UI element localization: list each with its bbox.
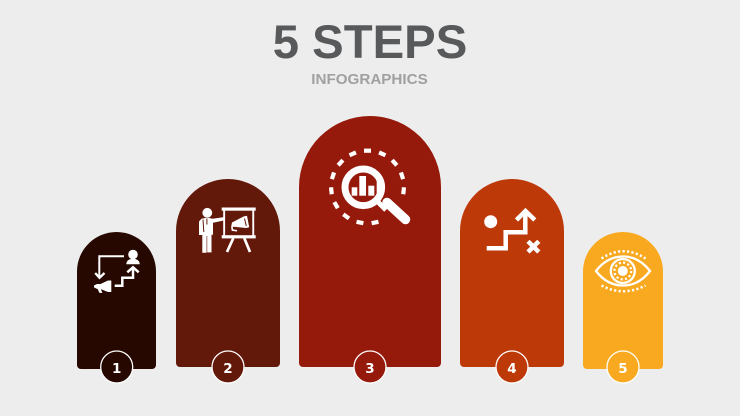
icon: person, stairs and megaphone [94, 250, 140, 293]
number badge 1: 1 [112, 361, 121, 377]
icon: magnifier with bar chart [331, 151, 406, 223]
number badge 3 [354, 351, 386, 383]
number badge 2 [212, 351, 244, 383]
number badge 2: 2 [223, 361, 233, 377]
icon: presenter at board [199, 208, 256, 253]
number badge 3: 3 [365, 361, 375, 377]
title: 5 STEPS [273, 16, 467, 69]
number badge 5 [607, 351, 639, 383]
icon: stairs with arrow, dot and cross [484, 211, 539, 252]
number badge 5: 5 [618, 361, 628, 377]
number badge 4 [496, 351, 528, 383]
panel: step 1 [77, 232, 156, 383]
icon: eye [596, 251, 650, 291]
number badge 1 [101, 351, 133, 383]
panel: step 5 [583, 232, 663, 383]
panel: step 2 [176, 179, 280, 383]
panel: step 4 [460, 179, 564, 383]
panel: step 3 [299, 116, 441, 383]
number badge 4: 4 [507, 361, 517, 377]
subtitle: INFOGRAPHICS [311, 71, 428, 88]
